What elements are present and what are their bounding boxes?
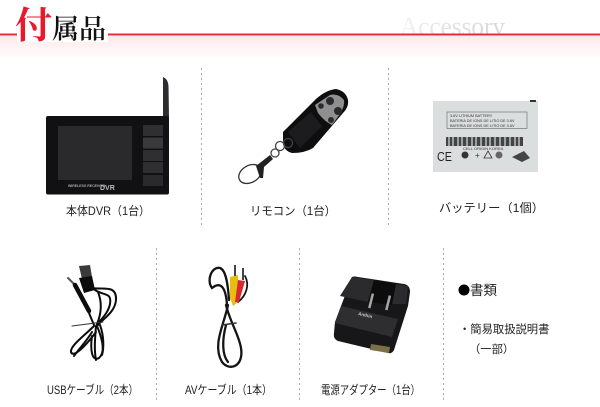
- item: AV cable: [185, 265, 272, 397]
- icon: USB cable: [68, 265, 116, 360]
- item: battery: [433, 100, 544, 215]
- icon: battery: BATERIA DE IONS DE LITIO DE 3.6V: [450, 119, 515, 123]
- label: 本体DVR（1台）: [66, 203, 150, 218]
- label: リモコン（1台）: [250, 203, 336, 218]
- header band: Accessory: [400, 12, 505, 41]
- label: 電源アダプター（1台）: [321, 382, 420, 397]
- label: AVケーブル（1本）: [185, 382, 272, 397]
- icon: DVR device: WIRELESS RECEIVER: [68, 184, 106, 188]
- label: バッテリー（1個）: [439, 201, 544, 215]
- documents text block: [458, 283, 549, 356]
- icon: battery: BATERIA DE IONS DE LITIO DE 3.6V: [450, 124, 515, 128]
- item: power adapter: [321, 276, 420, 397]
- icon: battery: [433, 100, 538, 172]
- icon: battery: 3.6V LITHIUM BATTERY: [450, 114, 493, 118]
- icon: AC adapter: Anthin: [358, 311, 373, 319]
- icon: battery: CELL ORIGIN KOREA: [463, 146, 504, 151]
- icon: DVR device: [46, 77, 169, 194]
- icon: battery: +: [475, 151, 480, 160]
- dividers: [156, 68, 444, 400]
- icon: AV cable: [210, 265, 247, 367]
- title: 属品: [52, 8, 106, 46]
- item: USB cable: [47, 265, 138, 397]
- document list: ・簡易取扱説明書: [459, 322, 549, 336]
- label: USBケーブル（2本）: [47, 382, 138, 397]
- icon: DVR device: DVR: [100, 185, 115, 192]
- title: [15, 0, 106, 49]
- item: remote: [235, 89, 348, 218]
- document list: [459, 322, 549, 356]
- icon: remote control: [235, 89, 348, 187]
- bullet heading: 書類: [470, 283, 497, 298]
- icon: battery: CE: [437, 149, 452, 164]
- header band: [0, 18, 600, 51]
- item: DVR body: [46, 77, 169, 218]
- document list: （一部）: [469, 343, 514, 356]
